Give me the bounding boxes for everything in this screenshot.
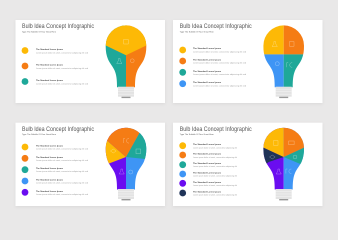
list item 4: Lorem ipsum dolor sit amet, consectetur adipiscing elit sed: [193, 84, 246, 87]
icon: document: [124, 39, 128, 44]
icon: arrows: [124, 138, 129, 143]
list item 1: The Standard Lorem Ipsum: [36, 48, 63, 51]
icon: presentation: [289, 141, 294, 145]
icon: flask: [276, 169, 281, 174]
list item 1: [179, 142, 237, 149]
list item 1: Lorem ipsum dolor sit amet, consectetur adipiscing elit sed: [36, 148, 88, 150]
list item 5: Lorem ipsum dolor sit amet, consectetur adipiscing elit sed: [36, 193, 88, 196]
list item 3: [179, 69, 246, 76]
list item 2: [179, 152, 237, 159]
icon: arrows: [287, 63, 292, 67]
list item 4: The Standard Lorem Ipsum: [36, 178, 63, 182]
list item 4: The Standard Lorem Ipsum: [193, 171, 221, 174]
list item 3: Lorem ipsum dolor sit amet, consectetur adipiscing elit: [193, 165, 237, 168]
list item 3: [179, 161, 237, 168]
bulb base: [276, 87, 292, 98]
list item 1: Lorem ipsum dolor sit amet, consectetur adipiscing elit sed: [193, 50, 246, 54]
title: Bulb Idea Concept Infographic: [22, 23, 94, 30]
bulb base: [118, 189, 134, 200]
list item 4: [179, 80, 246, 87]
list item 1: The Standard Lorem Ipsum: [36, 144, 63, 148]
subtitle: Type The Subtitle Of Your Great Here: [180, 30, 214, 34]
list item 3: The Standard Lorem Ipsum: [36, 79, 63, 82]
list item 2: Lorem ipsum dolor sit amet, consectetur adipiscing elit: [193, 156, 237, 159]
list item 5: The Standard Lorem Ipsum: [193, 181, 221, 184]
icon: megaphone: [270, 155, 275, 159]
subtitle: Type The Subtitle Of Your Great Here: [22, 133, 56, 136]
list item 2: [22, 155, 88, 162]
list item 6: The Standard Lorem Ipsum: [193, 190, 221, 193]
icon: bulb: [129, 170, 133, 174]
bulb graphic: [106, 128, 146, 200]
list item 5: Lorem ipsum dolor sit amet, consectetur adipiscing elit: [193, 184, 237, 187]
bulb base: [118, 87, 134, 98]
bulb base: [276, 189, 292, 200]
list item 5: [22, 189, 88, 196]
list item 2: The Standard Lorem Ipsum: [193, 58, 221, 62]
icon: document: [289, 42, 294, 46]
panel: three-part bulb: [16, 20, 165, 103]
icon: flask: [272, 42, 277, 46]
panel: four-part bulb: [173, 20, 322, 103]
list item 4: Lorem ipsum dolor sit amet, consectetur adipiscing elit sed: [36, 182, 88, 184]
icon: document: [136, 149, 141, 154]
icon: megaphone: [110, 149, 116, 153]
list item 2: [22, 63, 88, 70]
list item 4: [179, 171, 237, 178]
icon: bulb: [275, 62, 279, 66]
list item 5: The Standard Lorem Ipsum: [36, 190, 63, 193]
bulb graphic: [106, 25, 146, 98]
subtitle: Type The Subtitle Of Your Great Here: [22, 30, 56, 34]
list item 6: [179, 190, 237, 196]
list item 1: Lorem ipsum dolor sit amet, consectetur adipiscing elit: [193, 146, 237, 149]
bulb graphic: [263, 128, 304, 200]
list item 3: [22, 78, 88, 86]
list item 1: [22, 144, 88, 150]
icon: bulb: [130, 59, 134, 63]
list item 2: Lorem ipsum dolor sit amet, consectetur adipiscing elit sed: [193, 62, 246, 64]
icon: document: [273, 141, 278, 145]
list item 1: [179, 47, 246, 54]
list item 2: Lorem ipsum dolor sit amet, consectetur adipiscing elit sed: [36, 159, 88, 162]
list item 3: [22, 166, 88, 173]
list item 4: The Standard Lorem Ipsum: [193, 81, 221, 84]
title: Bulb Idea Concept Infographic: [180, 23, 252, 30]
list item 3: Lorem ipsum dolor sit amet, consectetur adipiscing elit sed: [36, 170, 88, 173]
list item 2: The Standard Lorem Ipsum: [193, 152, 221, 156]
list item 4: [22, 178, 88, 184]
icon: arrows: [286, 169, 291, 174]
list item 5: [179, 180, 237, 187]
icon: flask: [117, 58, 122, 64]
list item 2: The Standard Lorem Ipsum: [36, 64, 63, 66]
list item 6: Lorem ipsum dolor sit amet, consectetur adipiscing elit: [193, 194, 237, 196]
list item 3: The Standard Lorem Ipsum: [36, 167, 63, 170]
list item 1: [22, 47, 88, 54]
list item 4: Lorem ipsum dolor sit amet, consectetur adipiscing elit: [193, 175, 237, 178]
list item 1: The Standard Lorem Ipsum: [193, 143, 221, 146]
icon: bulb: [293, 155, 297, 159]
list item 2: [179, 58, 246, 64]
list item 1: The Standard Lorem Ipsum: [193, 47, 221, 50]
panel: six-part bulb: [173, 123, 322, 206]
title: Bulb Idea Concept Infographic: [22, 126, 94, 133]
list item 3: The Standard Lorem Ipsum: [193, 70, 221, 73]
bulb graphic: [263, 25, 304, 98]
subtitle: Type The Subtitle Of Your Great Here: [180, 133, 214, 136]
icon: flask: [119, 169, 124, 174]
list item 2: The Standard Lorem Ipsum: [36, 156, 63, 159]
list item 3: The Standard Lorem Ipsum: [193, 162, 221, 165]
list item 3: Lorem ipsum dolor sit amet, consectetur adipiscing elit sed: [36, 82, 88, 86]
list item 3: Lorem ipsum dolor sit amet, consectetur adipiscing elit sed: [193, 73, 246, 76]
list item 1: Lorem ipsum dolor sit amet, consectetur adipiscing elit sed: [36, 52, 88, 54]
title: Bulb Idea Concept Infographic: [180, 126, 252, 133]
panel: five-part bulb: [16, 123, 165, 206]
list item 2: Lorem ipsum dolor sit amet, consectetur adipiscing elit sed: [36, 67, 88, 70]
